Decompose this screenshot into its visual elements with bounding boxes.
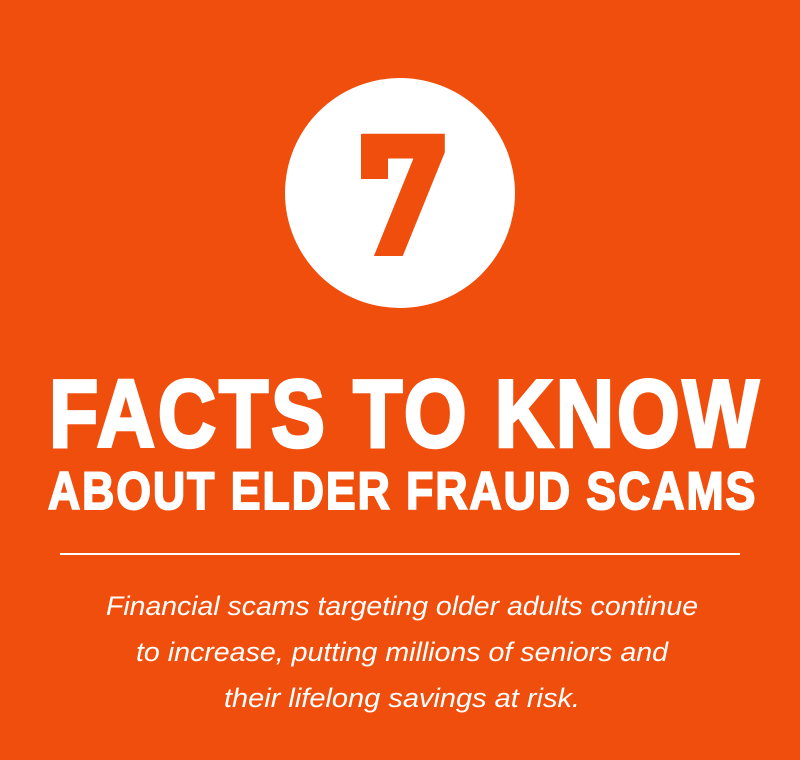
title: facts to know: FACTS TO KNOW (49, 360, 759, 467)
intro text: to increase, putting millions of seniors and (136, 637, 669, 667)
intro text: Financial scams targeting older adults continue (106, 591, 698, 621)
subtitle: about elder fraud scams: ABOUT ELDER FRAUD SCAMS (48, 463, 755, 521)
intro text: their lifelong savings at risk. (224, 683, 580, 713)
badge: number seven in circle: 7 (353, 102, 456, 294)
divider (60, 553, 740, 555)
intro text (106, 591, 698, 713)
badge: number seven in circle (285, 78, 515, 308)
